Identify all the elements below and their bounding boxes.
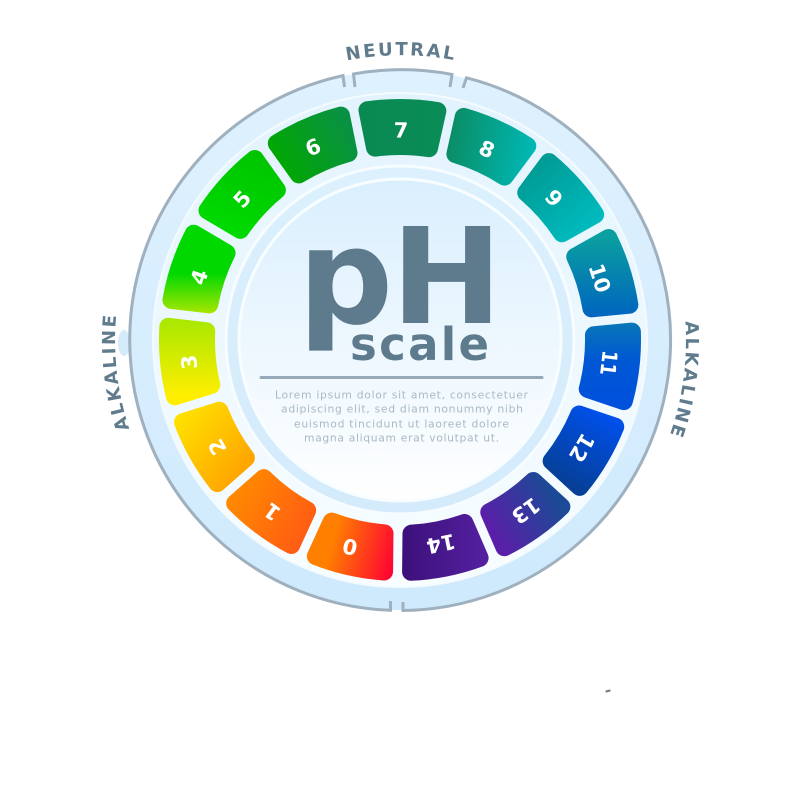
left zone bracket [130,76,390,610]
segment 3 [156,313,222,406]
segment 12 [535,395,630,501]
title [298,201,502,371]
segment 4 [158,221,240,323]
number 4: 4 [186,266,213,288]
inner disc [239,179,561,501]
inner ring [226,166,574,514]
title: H [391,201,502,355]
number 7: 7 [394,119,408,143]
number 14: 14 [424,529,457,558]
segment 8 [436,103,540,192]
label: alkaline right: ALKALINE [670,321,700,438]
description text: adipiscing elit, sed diam nonummy nibh [281,403,523,416]
number 2: 2 [203,434,232,459]
number 6: 6 [302,134,325,161]
segment 2 [168,392,262,497]
segment 6 [264,101,368,189]
number 9: 9 [540,185,567,212]
segment 0 [305,509,403,585]
divider [261,376,542,379]
number 10: 10 [584,261,615,296]
segment 13 [470,464,575,562]
outer ring [130,70,670,610]
segment band [153,93,647,587]
stray mark [605,689,611,693]
segment 1 [221,461,326,560]
number 8: 8 [475,136,498,164]
number 0: 0 [340,533,360,560]
segment 5 [193,145,295,248]
neutral zone bracket [354,70,452,87]
ph scale dial [118,70,671,610]
number 5: 5 [229,186,256,213]
description text: magna aliquam erat volutpat ut. [304,432,499,445]
segment 7 [358,99,446,157]
number 3: 3 [177,354,202,370]
label: alkaline left: ALKALINE [102,316,130,429]
description text: Lorem ipsum dolor sit amet, consectetuer [275,388,529,401]
right zone bracket [403,78,671,611]
number 12: 12 [564,429,599,466]
description text: euismod tincidunt ut laoreet dolore [294,417,509,430]
segment 11 [577,317,644,411]
label: neutral: NEUTRAL [346,42,454,60]
segment 10 [562,226,643,327]
segment 14 [393,511,491,585]
left ring notch [118,330,130,356]
description text [275,388,529,445]
number 1: 1 [259,498,285,526]
segment 9 [508,148,610,252]
title: scale [350,318,489,371]
number 13: 13 [507,492,544,529]
title: p [298,201,393,355]
number 11: 11 [595,349,622,377]
